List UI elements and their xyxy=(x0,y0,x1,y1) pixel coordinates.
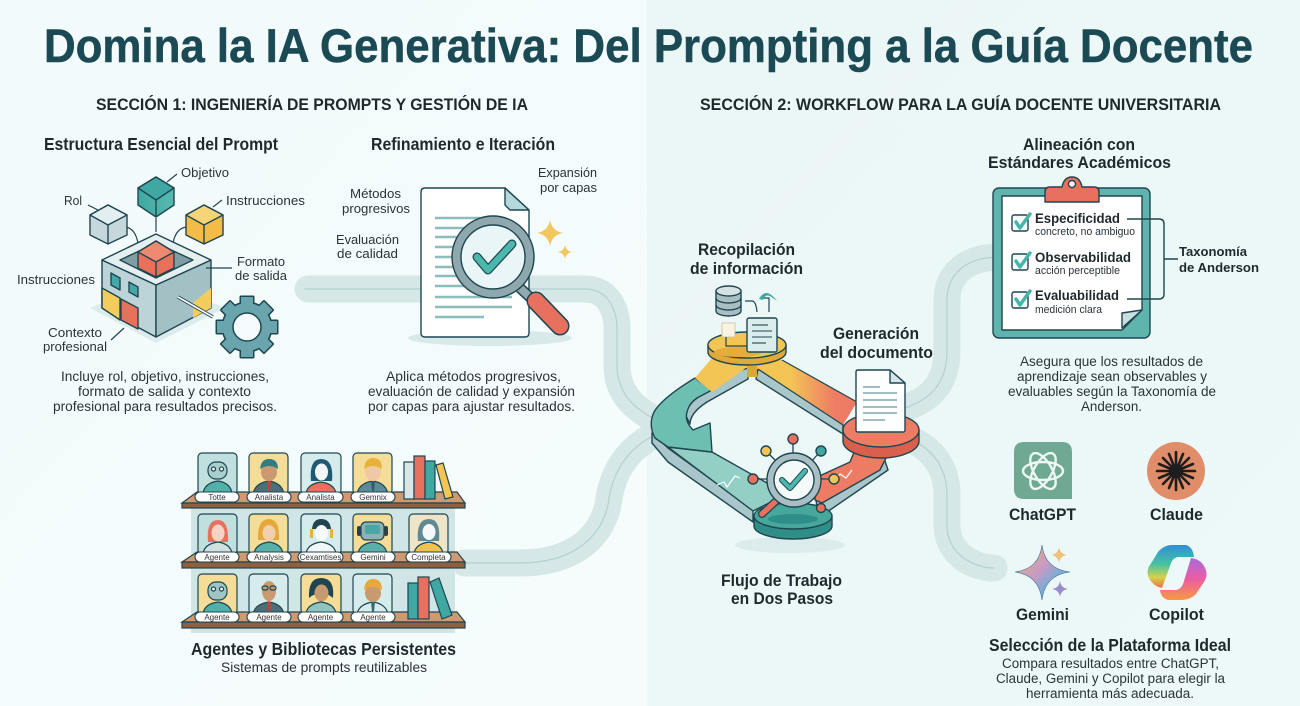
name labels: Totte xyxy=(208,493,226,502)
icon: document with magnifier xyxy=(408,188,572,346)
text: alineación description: Asegura que los resultados de xyxy=(1020,354,1203,369)
text: alineación description: aprendizaje sean observables y xyxy=(1017,369,1207,384)
icon: books top xyxy=(404,456,453,499)
label: generación xyxy=(820,325,933,362)
labels: refinement methods: Expansión xyxy=(538,165,597,180)
heading: selección: Selección de la Plataforma Ideal xyxy=(989,635,1231,655)
label: Claude: Claude xyxy=(1150,505,1203,524)
name labels xyxy=(195,492,451,622)
labels: prompt parts: Instrucciones xyxy=(226,193,306,208)
row 3 agent cards xyxy=(198,574,392,614)
label: Copilot: Copilot xyxy=(1149,605,1204,624)
labels: refinement methods: Métodos xyxy=(350,186,401,201)
connector paths xyxy=(305,257,1000,568)
labels: prompt parts: Objetivo xyxy=(181,165,229,180)
text: refinamiento description xyxy=(368,369,575,414)
label: taxonomía xyxy=(1179,244,1259,275)
heading: alineación xyxy=(988,136,1171,172)
text: selección description: Compara resultados entre ChatGPT, xyxy=(1002,656,1219,671)
checklist text xyxy=(1035,210,1135,316)
icon: gear xyxy=(217,297,277,357)
text: refinamiento description: por capas para ajustar resultados. xyxy=(368,399,575,414)
text: alineación description xyxy=(1008,354,1216,414)
labels: refinement methods: Evaluación xyxy=(336,232,399,247)
text: estructura description: Incluye rol, objetivo, instrucciones, xyxy=(61,369,269,384)
row 2 agent cards xyxy=(198,514,448,554)
checklist text: concreto, no ambiguo xyxy=(1035,226,1135,238)
heading: alineación: Estándares Académicos xyxy=(988,154,1171,172)
icon: central check with nodes xyxy=(748,434,839,514)
text: alineación description: Anderson. xyxy=(1081,399,1142,414)
panel: flujo de trabajo xyxy=(651,241,933,608)
name labels: Agente xyxy=(204,553,230,562)
label: ChatGPT: ChatGPT xyxy=(1009,505,1077,524)
text: refinamiento description: evaluación de calidad y expansión xyxy=(368,384,575,399)
name labels: Gemnix xyxy=(359,493,387,502)
text: selección description: Claude, Gemini y Copilot para elegir la xyxy=(996,671,1225,686)
icon: small document xyxy=(722,318,777,352)
label: taxonomía: de Anderson xyxy=(1179,260,1259,275)
name labels: Agente xyxy=(256,613,282,622)
checklist text: acción perceptible xyxy=(1035,265,1120,277)
shelves xyxy=(182,492,465,628)
labels: prompt parts: Contexto xyxy=(48,325,102,340)
name labels: Completa xyxy=(411,553,446,562)
section heading 1: SECCIÓN 1: INGENIERÍA DE PROMPTS Y GESTIÓN DE IA xyxy=(96,95,528,114)
heading: estructura: Estructura Esencial del Prompt xyxy=(44,134,278,154)
label: generación: del documento xyxy=(820,344,933,362)
icon: books bottom xyxy=(408,577,452,619)
label: Gemini: Gemini xyxy=(1016,605,1069,624)
checklist text: Observabilidad xyxy=(1035,249,1131,265)
name labels: Agente xyxy=(308,613,334,622)
heading: refinamiento: Refinamiento e Iteración xyxy=(371,134,555,154)
name labels: Analista xyxy=(306,493,335,502)
labels: prompt parts: Rol xyxy=(64,193,82,208)
labels: prompt parts: profesional xyxy=(43,339,107,354)
shelf backdrop xyxy=(191,506,455,633)
text: estructura description xyxy=(53,369,277,414)
label: flujo de trabajo xyxy=(721,572,842,608)
checklist text: medición clara xyxy=(1035,304,1103,316)
panel: refinamiento xyxy=(336,134,597,414)
labels: refinement methods xyxy=(336,165,597,261)
diagram: cubes and building xyxy=(88,174,232,343)
diagram: two-step loop xyxy=(651,332,919,553)
label: generación: Generación xyxy=(833,325,919,343)
panel: agentes y bibliotecas xyxy=(182,453,465,675)
labels: prompt parts: Instrucciones xyxy=(17,272,96,287)
icon: Gemini xyxy=(1015,545,1070,600)
icon: generated document xyxy=(856,370,905,432)
labels: refinement methods: por capas xyxy=(540,180,597,195)
icon: sparkles xyxy=(537,220,572,259)
label: flujo de trabajo: Flujo de Trabajo xyxy=(721,572,842,590)
labels: prompt parts: Formato xyxy=(237,254,285,269)
name labels: Cexamtises xyxy=(300,553,341,562)
name labels: Agente xyxy=(204,613,230,622)
row 1 agent cards xyxy=(198,453,392,494)
text: selección description xyxy=(996,656,1225,701)
labels: prompt parts xyxy=(17,165,306,354)
labels: refinement methods: de calidad xyxy=(337,246,398,261)
name labels: Analysis xyxy=(254,553,284,562)
checklist text: Evaluabilidad xyxy=(1035,287,1119,303)
label: recopilación: Recopilación xyxy=(698,241,795,259)
name labels: Gemini xyxy=(360,553,386,562)
labels: refinement methods: progresivos xyxy=(342,201,410,216)
panel: alineación xyxy=(988,136,1259,414)
labels: prompt parts: de salida xyxy=(235,268,288,283)
text: estructura description: formato de salida y contexto xyxy=(78,384,251,399)
icon: ChatGPT xyxy=(1014,442,1072,499)
icon: database xyxy=(716,286,777,316)
label: recopilación xyxy=(690,241,803,278)
heading: agentes: Agentes y Bibliotecas Persistentes xyxy=(191,639,456,659)
label: recopilación: de información xyxy=(690,260,803,278)
panel: plataformas xyxy=(989,442,1231,701)
text: selección description: herramienta más adecuada. xyxy=(1026,686,1194,701)
heading: alineación: Alineación con xyxy=(1023,136,1135,154)
panel: estructura del prompt xyxy=(17,134,306,414)
label: taxonomía: Taxonomía xyxy=(1179,244,1248,259)
text: refinamiento description: Aplica métodos progresivos, xyxy=(386,369,561,384)
icon: clipboard xyxy=(993,177,1178,338)
text: agentes subtitle: Sistemas de prompts reutilizables xyxy=(221,659,427,675)
name labels: Agente xyxy=(360,613,386,622)
name labels: Analista xyxy=(255,493,284,502)
icon: Copilot xyxy=(1148,545,1206,600)
icon: Claude xyxy=(1147,442,1205,500)
label: flujo de trabajo: en Dos Pasos xyxy=(731,590,833,608)
checklist text: Especificidad xyxy=(1035,210,1120,226)
text: estructura description: profesional para resultados precisos. xyxy=(53,399,277,414)
text: alineación description: evaluables según la Taxonomía de xyxy=(1008,384,1216,399)
section heading 2: SECCIÓN 2: WORKFLOW PARA LA GUÍA DOCENTE UNIVERSITARIA xyxy=(700,95,1221,114)
